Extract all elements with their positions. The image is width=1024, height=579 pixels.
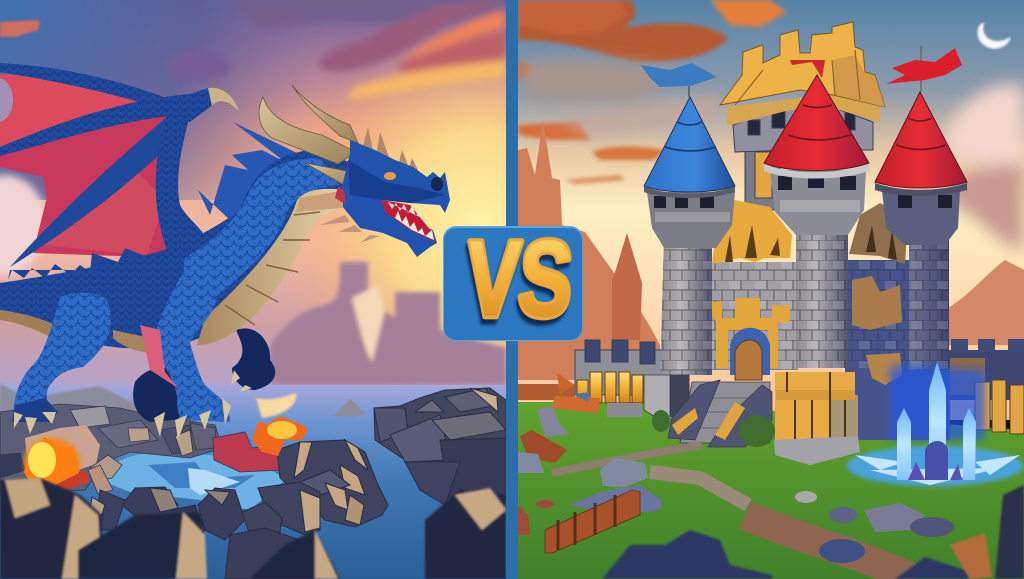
centre red tower (764, 60, 869, 368)
red rocks (213, 432, 282, 472)
dirt paths (552, 445, 915, 579)
small sea rock (333, 399, 366, 417)
distant grey shore (0, 383, 138, 412)
distant castle silhouette (270, 262, 506, 385)
sea (0, 385, 506, 579)
central rock heap (90, 440, 388, 579)
foreground dark rocks right (602, 485, 1024, 579)
right fort wall (949, 339, 1024, 400)
vertical divider bar (506, 0, 518, 579)
ground grass (518, 402, 1024, 579)
left fort wall (575, 340, 662, 395)
grey wall base (607, 403, 642, 417)
broken wooden debris (518, 373, 600, 413)
grey main wall (708, 262, 798, 370)
dragon belly plates (0, 189, 347, 353)
green bushes (652, 410, 775, 447)
right red flag (886, 46, 962, 92)
gold palisade front (774, 372, 860, 465)
right rock stack (374, 388, 506, 507)
dragon front leg (140, 267, 231, 440)
castle gate (712, 298, 790, 380)
pool of water (100, 452, 285, 510)
dragon far claws (231, 370, 252, 392)
dragon hind leg (12, 293, 111, 434)
fire left (24, 436, 90, 492)
stone steps (644, 375, 772, 447)
left sky clouds (0, 0, 506, 275)
distant mountains and spires (518, 120, 1024, 380)
dragon tail spines (8, 248, 150, 280)
rear keep (733, 100, 873, 210)
scattered stones (518, 458, 954, 563)
brown cloth banner (849, 203, 908, 264)
dragon wing membrane (0, 74, 168, 256)
blue tower (644, 97, 735, 375)
peach boulder (25, 425, 100, 472)
golden keep roof (720, 22, 885, 126)
blue-grey main wall (845, 260, 950, 440)
dragon wing bones (0, 63, 239, 267)
right sunset sky (518, 0, 1024, 420)
VS badge (443, 220, 583, 341)
VS lettering: VS (462, 220, 576, 340)
left palisade (577, 372, 643, 403)
gold cloth banner (712, 200, 792, 264)
stone block crate (866, 353, 902, 385)
foreground dark rocks (0, 478, 506, 579)
right palisade (975, 380, 1024, 434)
dragon body and neck (0, 150, 350, 348)
panel: castle side (518, 0, 1024, 579)
crescent moon (979, 25, 1008, 47)
rocky shore left (0, 404, 282, 495)
dragon head (320, 140, 450, 257)
wooden fence (545, 490, 640, 553)
dragon (0, 63, 450, 440)
left sunset sky (0, 0, 506, 385)
dragon chest scales (184, 158, 340, 305)
broken cart debris (518, 405, 570, 473)
dragon horns (259, 85, 358, 212)
blue magic crystals (847, 362, 1023, 486)
right sky clouds (518, 0, 1024, 250)
brown wall patch (852, 276, 902, 330)
fire right (252, 393, 308, 456)
blue flag (641, 63, 717, 97)
dragon back spines (198, 122, 297, 225)
panel: dragon side (0, 0, 506, 579)
right red tower (875, 92, 967, 370)
dragon far legs (133, 328, 275, 422)
dragon head crest (362, 127, 418, 170)
